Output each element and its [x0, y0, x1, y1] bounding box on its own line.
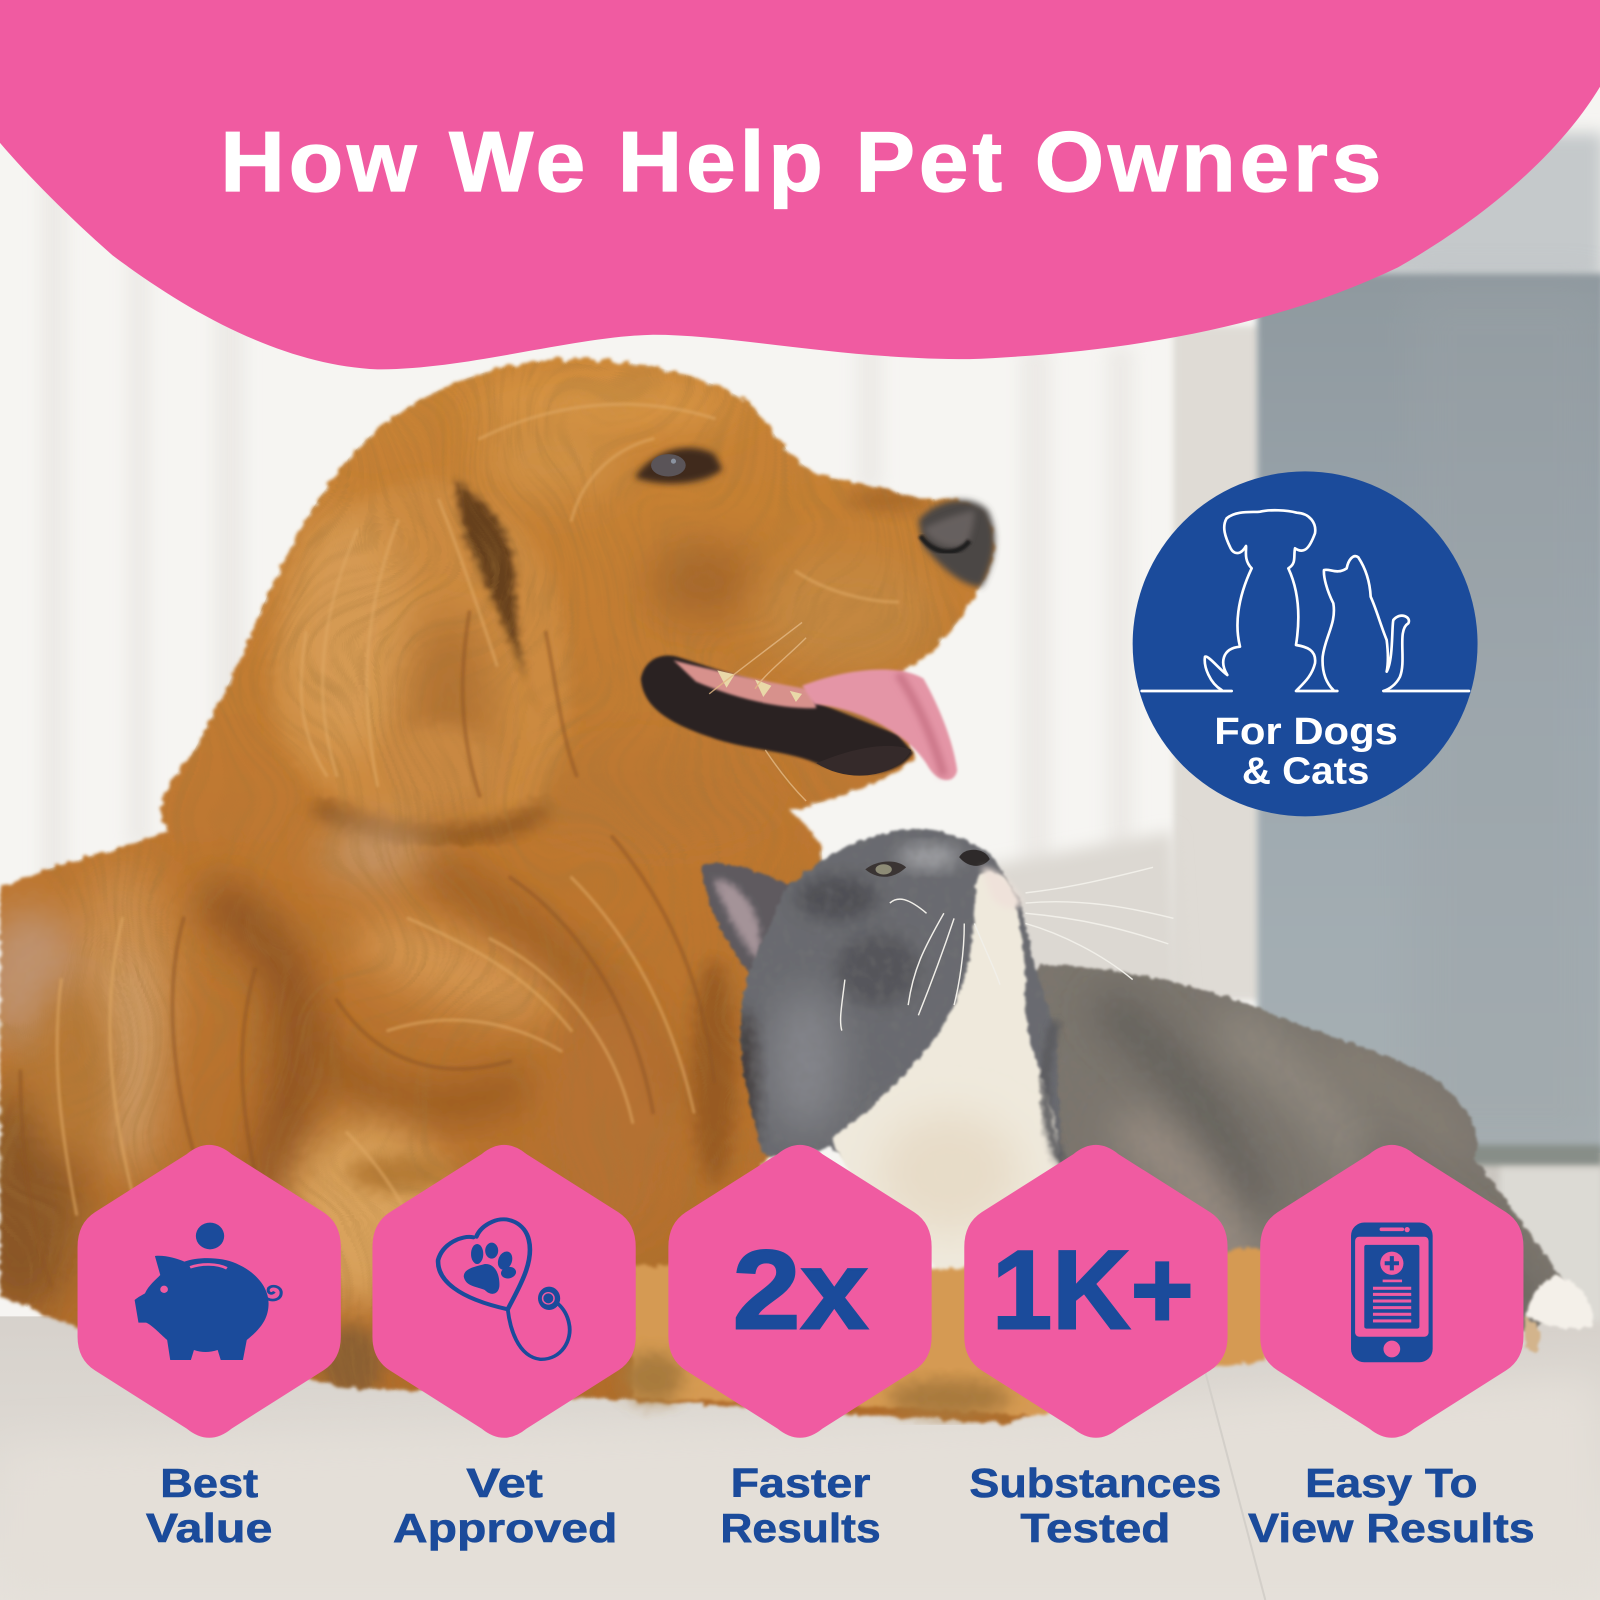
- dog fur strands: [0, 347, 1031, 1429]
- icon: dog and cat outline: [1142, 510, 1469, 691]
- pink header wave: [0, 0, 1600, 369]
- cat muzzle: [982, 867, 1022, 909]
- dog ear: [273, 480, 569, 837]
- badge text: [1214, 710, 1398, 792]
- label: Best: [160, 1460, 259, 1506]
- dog head shading: [469, 374, 939, 745]
- badge: for dogs and cats: [1133, 471, 1478, 816]
- label: Easy To: [1305, 1460, 1478, 1506]
- label: Faster: [731, 1460, 871, 1506]
- cat paw: [1526, 1276, 1593, 1352]
- hexagon: [1260, 1145, 1523, 1438]
- label: [1248, 1460, 1535, 1551]
- photo: dog front legs: [622, 1247, 1265, 1416]
- label: Vet: [466, 1460, 543, 1506]
- feature: faster results: [668, 1145, 932, 1551]
- cat nose: [959, 850, 990, 866]
- feature: substances tested: [964, 1145, 1228, 1551]
- label: [720, 1460, 881, 1551]
- hexagon: [372, 1145, 636, 1438]
- feature: easy to view results: [1248, 1145, 1535, 1551]
- dog neck and chest fur: [0, 755, 765, 1399]
- label: View Results: [1248, 1505, 1535, 1551]
- label: Tested: [1020, 1505, 1170, 1551]
- cat white chest: [832, 872, 1061, 1276]
- dog mouth: [641, 655, 957, 780]
- icon: stethoscope with paw: [438, 1219, 570, 1359]
- label: Results: [720, 1505, 881, 1551]
- icon: piggy bank: [135, 1223, 281, 1360]
- feature: best value: [78, 1145, 341, 1551]
- label: Substances: [969, 1460, 1221, 1506]
- cat body: [1036, 962, 1564, 1332]
- hexagon: [78, 1145, 341, 1438]
- title: How We Help Pet Owners: [220, 113, 1381, 209]
- label: [393, 1460, 617, 1551]
- photo: golden retriever: [0, 347, 1031, 1429]
- big number: 2x: 2x: [733, 1227, 868, 1353]
- cat ear: [702, 863, 801, 980]
- dog eye: [635, 448, 722, 483]
- badge text: & Cats: [1242, 750, 1369, 792]
- label: Value: [146, 1505, 272, 1551]
- label: Approved: [393, 1505, 617, 1551]
- label: [969, 1460, 1221, 1551]
- dog whiskers: [709, 622, 806, 801]
- dog nose: [918, 500, 995, 587]
- hexagon: [668, 1145, 932, 1438]
- photo: grey and white cat: [702, 827, 1593, 1352]
- cat head and neck: [738, 827, 1060, 1158]
- badge text: For Dogs: [1214, 710, 1398, 752]
- feature: vet approved: [372, 1145, 636, 1551]
- big number: 1K+: 1K+: [992, 1227, 1194, 1353]
- icon: phone with medical report: [1351, 1222, 1433, 1362]
- cat whiskers: [841, 867, 1173, 1031]
- hexagon: [964, 1145, 1228, 1438]
- label: [146, 1460, 272, 1551]
